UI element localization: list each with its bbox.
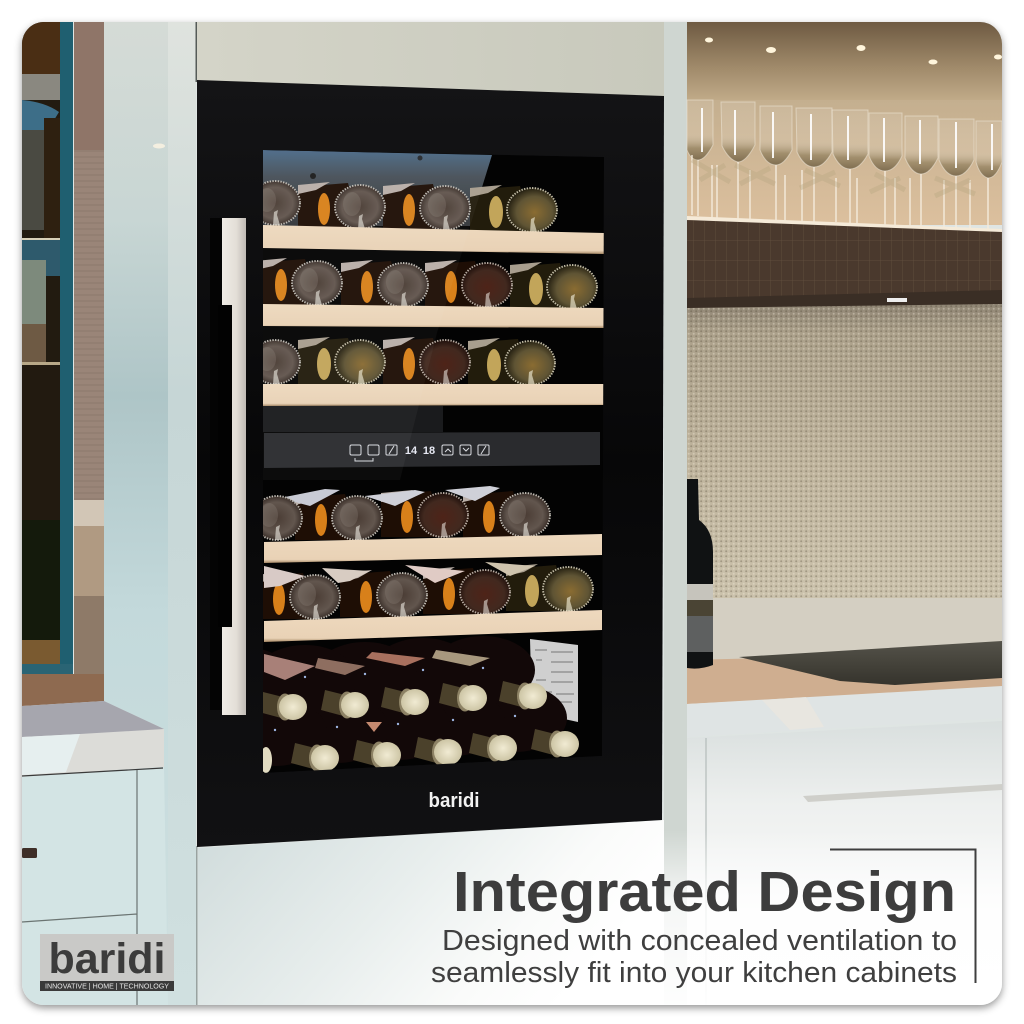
wine glasses xyxy=(687,100,1002,229)
shelf 2 xyxy=(263,304,604,328)
shelf 5 bottles xyxy=(253,562,593,619)
temperature display: 14 xyxy=(405,445,418,457)
tile band xyxy=(687,220,1002,300)
shelf 3 bottles xyxy=(250,337,555,385)
shelf 1 xyxy=(263,225,604,254)
text block xyxy=(431,850,976,989)
cabinet handle xyxy=(803,784,1002,802)
left background: glass cabinet xyxy=(22,22,104,708)
glass shelf edge xyxy=(687,216,1002,233)
title: Integrated Design xyxy=(453,860,956,924)
lower cabinet panel xyxy=(198,820,664,1005)
countertop xyxy=(687,658,1002,704)
temperature display xyxy=(406,446,435,454)
shelf 1 bottles xyxy=(250,181,557,232)
hammered backsplash xyxy=(687,298,1002,600)
left countertop xyxy=(22,701,164,776)
glass window xyxy=(263,150,604,773)
specification sheet xyxy=(530,639,578,722)
description line 2: seamlessly fit into your kitchen cabinets xyxy=(431,957,957,989)
wall behind glasses xyxy=(687,100,1002,225)
shelf 5 xyxy=(264,610,602,642)
fridge logo: baridi xyxy=(428,790,480,812)
door handle xyxy=(210,218,246,715)
rear wall xyxy=(263,150,492,226)
right cabinets xyxy=(687,778,1002,1005)
left cabinets xyxy=(22,767,168,1005)
ceiling xyxy=(687,22,1002,104)
shelf 2 bottles xyxy=(255,258,597,309)
control panel xyxy=(264,432,600,468)
shelf 4 bottles xyxy=(252,486,550,540)
description line 1: Designed with concealed ventilation to xyxy=(442,925,957,957)
white fade behind text xyxy=(664,830,1002,1005)
lower bottle stack xyxy=(191,636,579,773)
wine bottle on counter xyxy=(687,479,713,669)
glass reflection xyxy=(263,150,492,480)
left pillar xyxy=(104,22,198,1005)
upper cabinet panel xyxy=(197,22,664,96)
shelf 3 xyxy=(263,384,604,406)
right pillar xyxy=(664,22,687,878)
door frame xyxy=(197,80,664,847)
brand logo: baridi xyxy=(48,935,166,983)
wine fridge xyxy=(191,80,664,847)
corner bracket xyxy=(830,850,976,983)
lower backsplash glow xyxy=(713,598,1002,660)
marble counter edge xyxy=(688,686,1002,704)
shelf 4 xyxy=(264,534,602,563)
temperature display: 18 xyxy=(423,445,435,457)
induction hob xyxy=(739,641,1002,685)
ceiling lights xyxy=(705,38,1002,64)
right kitchen background xyxy=(687,22,1002,1005)
brand logo: INNOVATIVE | HOME | TECHNOLOGY xyxy=(45,984,169,990)
